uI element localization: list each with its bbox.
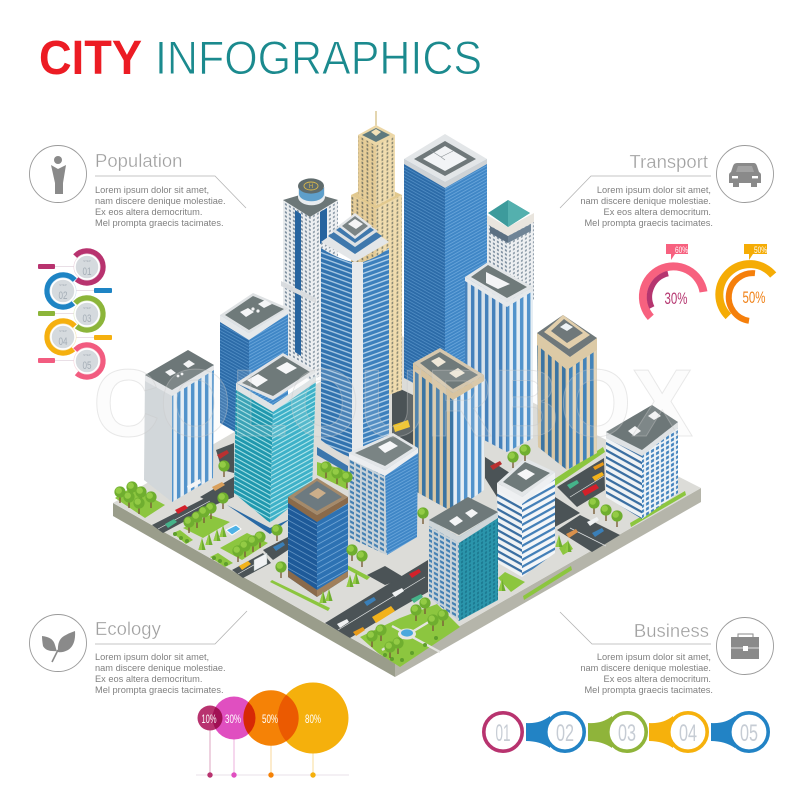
lawns and hedges [115,447,686,667]
step 01 [38,251,103,283]
step 03: 03 [82,313,92,325]
text block: ecology: Lorem ipsum dolor sit amet, [95,652,209,662]
step ring 01: 01 [496,720,510,747]
city platform [113,335,701,677]
roads [152,385,620,638]
step ring 03 [608,713,646,751]
pool [226,525,241,535]
step chain: horizontal 01 to 05 [484,713,768,751]
step ring 02: 02 [556,720,574,747]
bubble chart: 80% [305,712,321,726]
text block: population [95,185,226,228]
step ring 05: 05 [740,720,758,747]
billboard [254,553,267,571]
gauge: 30 percent [643,244,704,317]
text block: transport: Mel prompta graecis tacimates. [584,218,713,228]
bubble chart: 10% [202,712,217,726]
text block: ecology: nam discere denique molestiae. [95,663,226,673]
title: CITY [39,32,142,85]
bushes [173,532,438,662]
text block: business: Ex eos altera democritum. [604,674,711,684]
watermark: COLOURBOX [93,350,693,457]
step 05: 05 [82,360,92,372]
step 02: 02 [58,290,68,302]
step 04 [47,321,112,353]
step 02 [47,275,112,307]
text block: business: nam discere denique molestiae. [580,663,711,673]
text block: business [580,652,713,695]
icon: car [716,146,774,202]
panel: business [560,612,774,695]
gauge: 30 percent: 60% [675,245,688,255]
building: blue and white tower [465,262,533,452]
heading: ecology: Ecology [95,618,162,639]
text block: population: Mel prompta graecis tacimates. [95,218,224,228]
step 04: 04 [58,336,68,348]
icon: briefcase [716,618,774,674]
step ring 02 [546,713,584,751]
text block: business: Lorem ipsum dolor sit amet, [597,652,711,662]
gauge: 30 percent: 30% [664,289,688,308]
building: gold tower [351,111,402,400]
building: rounded glass tower [317,213,389,473]
building: helipad tower: H [309,184,313,190]
text block: ecology [95,652,226,695]
icon: person [30,146,86,202]
icon: leaves [30,614,86,672]
title [39,31,482,85]
building: white and blue left [144,350,214,502]
building: helipad tower [281,178,338,380]
building: large blue tower [404,134,487,400]
building: tan tower [537,315,597,470]
trees [114,444,623,658]
step 05 [38,345,103,377]
road lane markings [158,476,606,630]
step 03 [38,298,103,330]
heading: transport: Transport [630,151,708,172]
gauge: 50 percent: 50% [754,245,767,255]
building: teal roof tower [487,200,534,300]
building: teal front [429,497,498,621]
building: turquoise tower [227,353,316,534]
step 05: STEP [83,353,91,357]
bubble chart: 50% [262,712,278,726]
step 01: 01 [82,266,92,278]
panel: population [30,146,246,228]
fountain [398,628,416,640]
building: blue office left [220,293,288,440]
building: right white striped [497,458,555,577]
text block: transport: nam discere denique molestiae. [580,196,711,206]
panel: ecology [30,611,247,695]
text block: ecology: Ex eos altera democritum. [95,674,202,684]
text block: ecology: Mel prompta graecis tacimates. [95,685,224,695]
bubble chart [196,682,349,778]
building: white and blue mid [348,433,418,555]
text block: population: Lorem ipsum dolor sit amet, [95,185,209,195]
step ring 01 [484,713,522,751]
step 04: STEP [59,329,67,333]
text block: transport [580,185,713,228]
gauge: 50 percent [719,244,773,321]
step chain: vertical 01 to 05 [38,251,112,377]
step ring 04 [669,713,707,751]
building: dark blue with brown roof [288,478,348,597]
step 03: STEP [83,306,91,310]
park paths [382,620,440,652]
heading: population: Population [95,150,182,171]
isometric city [113,111,701,677]
text block: transport: Lorem ipsum dolor sit amet, [597,185,711,195]
heading: business: Business [634,620,709,641]
panel: transport [560,146,774,228]
step ring 03: 03 [618,720,636,747]
text block: transport: Ex eos altera democritum. [604,207,711,217]
title: INFOGRAPHICS [155,31,482,84]
step 02: STEP [59,283,67,287]
building: tan and blue mid tower [413,348,484,512]
gauge: 50 percent: 50% [742,288,766,307]
step ring 04: 04 [679,720,697,747]
text block: population: Ex eos altera democritum. [95,207,202,217]
bubble chart: 30% [225,712,241,726]
cars and buses [165,420,604,636]
step ring 05 [730,713,768,751]
text block: population: nam discere denique molestiae. [95,196,226,206]
building: right blue striped [606,405,678,519]
step 01: STEP [83,259,91,263]
text block: business: Mel prompta graecis tacimates. [584,685,713,695]
